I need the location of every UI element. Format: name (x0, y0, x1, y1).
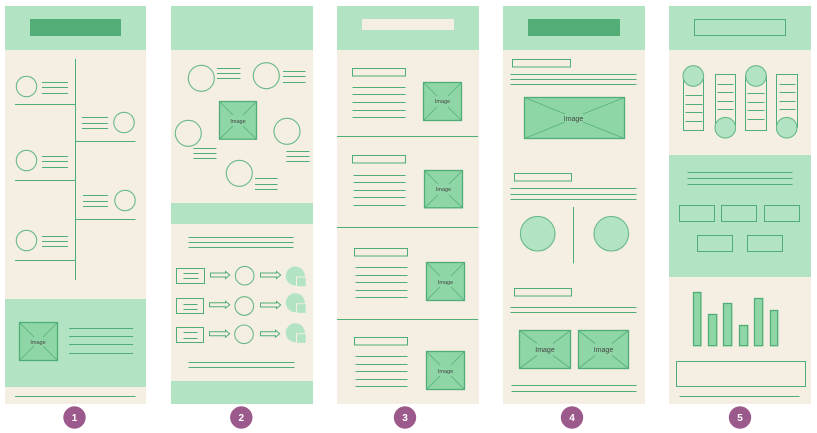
image right: Image (594, 347, 613, 354)
section 1: Image (435, 99, 450, 105)
title bar 3 (362, 19, 454, 30)
flow row 3 (176, 323, 306, 344)
flow row 1 (176, 266, 306, 287)
badge 4 (561, 406, 583, 429)
text lines beside image (69, 328, 133, 353)
footer rule 1 (15, 395, 136, 397)
radial item bottom (226, 160, 278, 189)
text lines 1 (510, 74, 637, 84)
column 1 (683, 66, 704, 131)
timeline item 3 (15, 150, 75, 180)
box grid (680, 206, 800, 252)
image placeholder: Image (30, 340, 46, 346)
section 2 (352, 156, 462, 208)
radial item top right (253, 63, 306, 89)
image left (520, 330, 570, 368)
panel: layout 4 (503, 6, 645, 404)
footer text lines (511, 385, 637, 391)
title bar 4 (528, 19, 620, 36)
section 4 (354, 338, 464, 390)
column 2 (715, 74, 736, 138)
timeline spine (74, 59, 76, 280)
timeline item 4 (76, 190, 136, 220)
subheading box 3 (514, 288, 572, 296)
panel: layout 3 (337, 6, 479, 404)
timeline item 1 (15, 76, 75, 104)
section 4: Image (438, 369, 453, 375)
comparison circles with divider (520, 207, 629, 264)
green footer section 1 (5, 299, 146, 387)
section 3: Image (438, 280, 453, 286)
section text lines (687, 172, 793, 184)
section 1 (352, 68, 462, 120)
radial item top left (188, 65, 241, 91)
header band 2 (171, 6, 313, 50)
header band 1 (5, 6, 146, 50)
column 3 (746, 66, 766, 131)
timeline item 5 (15, 230, 75, 260)
footer rule 5 (679, 395, 800, 397)
wide image: Image (564, 116, 583, 123)
green middle section 5 (669, 155, 811, 277)
header band 4 (503, 6, 645, 50)
badge 2: 2 (239, 413, 245, 424)
badge 2 (230, 406, 252, 429)
timeline item 2 (76, 112, 136, 142)
radial item left (175, 120, 217, 158)
badge 5: 5 (737, 413, 743, 424)
bar chart (694, 292, 778, 346)
badge 5 (729, 406, 751, 429)
image placeholder (20, 322, 58, 360)
badge 4: 4 (569, 413, 575, 424)
flow row 2 (176, 293, 306, 315)
central image: Image (230, 119, 246, 125)
header band 5 (669, 6, 811, 50)
section 3 (354, 248, 464, 300)
footer band 2 (171, 381, 313, 404)
closing text lines (188, 362, 295, 367)
subheading box 1 (512, 60, 570, 67)
caption box (676, 362, 806, 386)
text lines 3 (510, 307, 637, 312)
intro text lines (188, 237, 294, 247)
wide image (524, 98, 624, 138)
subheading box 2 (514, 174, 572, 181)
title box 5 (694, 20, 786, 36)
panel: layout 2 (171, 6, 313, 404)
mid band 2 (171, 203, 313, 224)
panel: layout 5 (669, 6, 811, 404)
section 2: Image (436, 187, 451, 193)
title bar 1 (30, 19, 121, 36)
divider 1 (337, 135, 478, 137)
badge 3 (394, 406, 416, 429)
badge 1 (63, 406, 86, 429)
divider 3 (337, 318, 478, 320)
panel: layout 1 (5, 6, 146, 404)
badge 1: 1 (72, 413, 78, 424)
radial item right (274, 118, 310, 161)
central image (220, 102, 256, 139)
column 4 (776, 74, 798, 138)
image right (578, 330, 628, 368)
divider 2 (337, 226, 478, 228)
text lines 2 (510, 188, 637, 199)
header band 3 (337, 6, 479, 50)
image left: Image (535, 347, 555, 354)
badge 3: 3 (402, 413, 408, 424)
